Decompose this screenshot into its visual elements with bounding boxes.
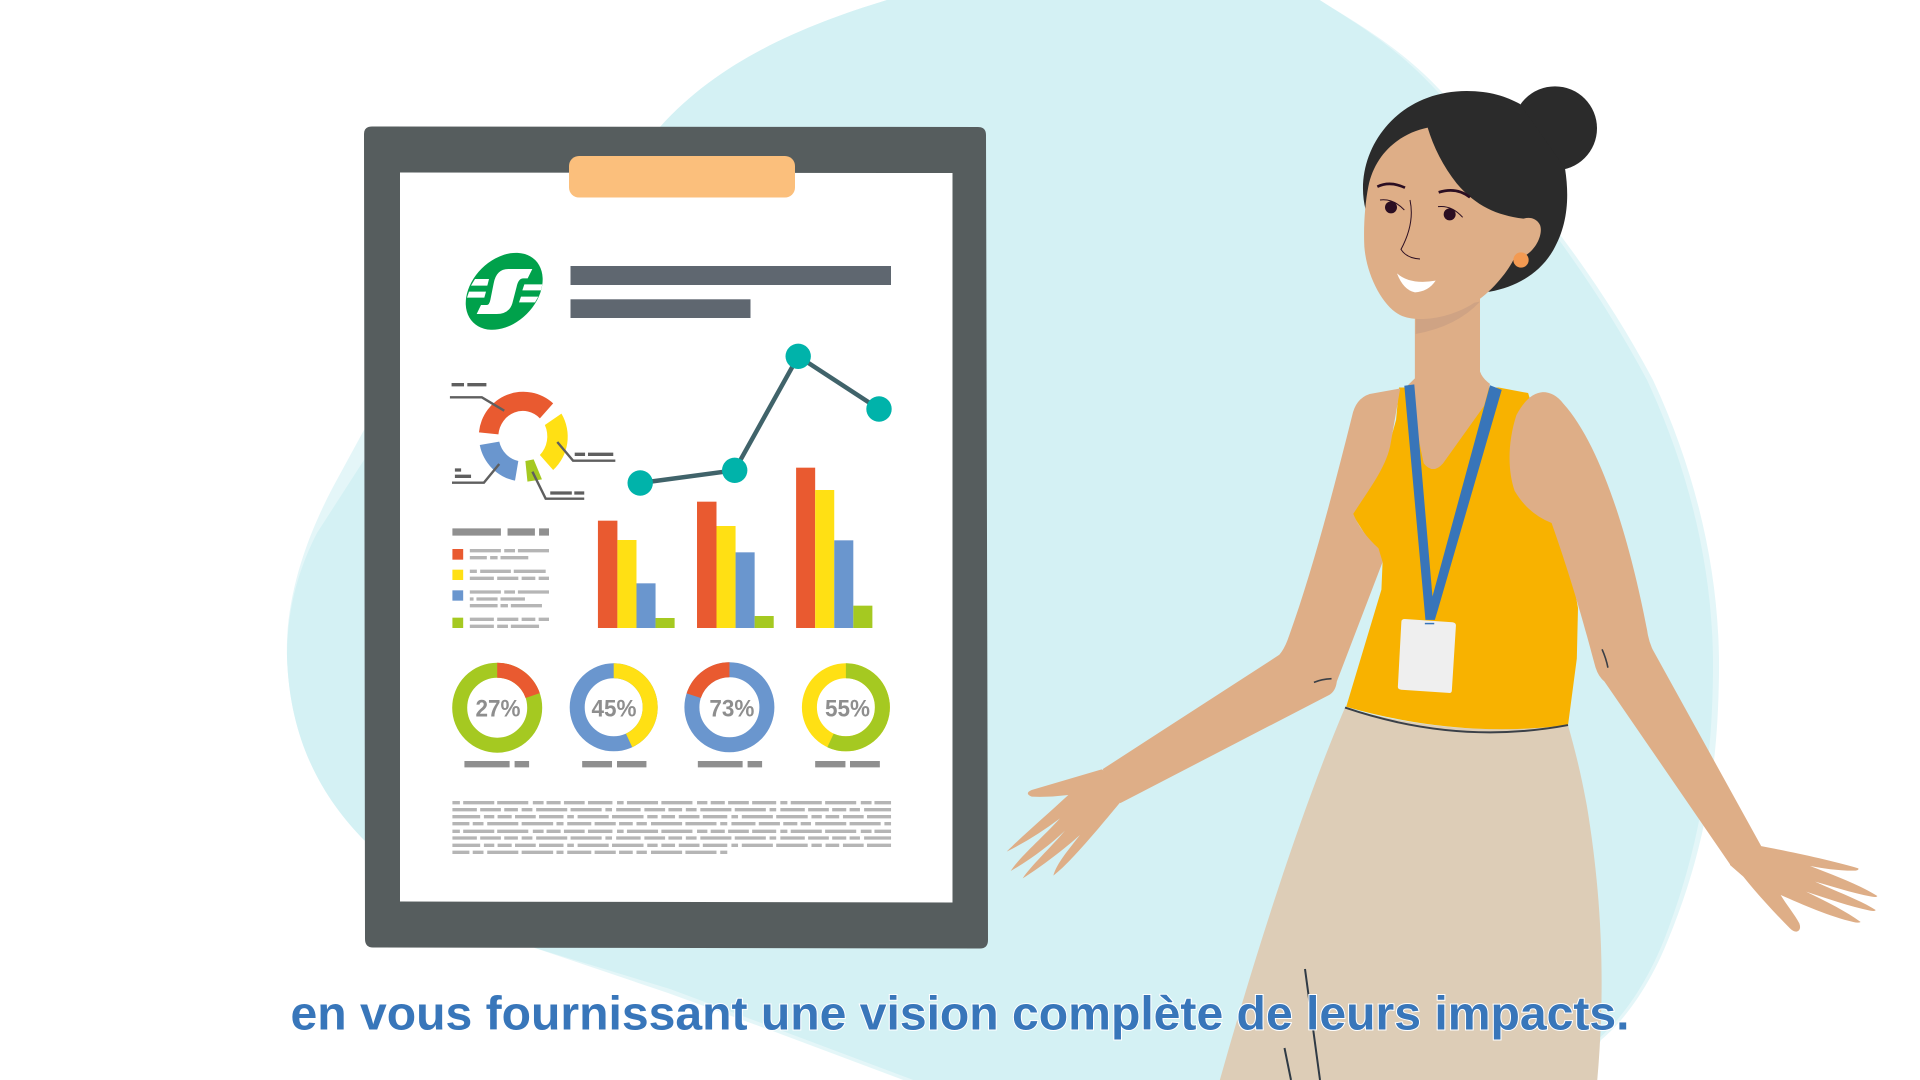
donut caption bars xyxy=(464,755,880,774)
panel: clipboard xyxy=(364,126,988,948)
hair xyxy=(1363,91,1567,293)
skirt xyxy=(1218,708,1602,1080)
chin shadow xyxy=(1416,302,1480,334)
left hand xyxy=(1007,769,1120,878)
badge xyxy=(1398,619,1456,693)
donut 45% xyxy=(577,671,650,744)
nose xyxy=(1401,200,1420,259)
lanyard xyxy=(1404,384,1502,620)
donut 73% xyxy=(682,660,777,755)
body xyxy=(1103,282,1761,1080)
tank top xyxy=(1346,388,1578,729)
earring xyxy=(1513,252,1529,268)
smile xyxy=(1397,273,1436,292)
face xyxy=(1364,128,1541,319)
donut 55%: 55% xyxy=(825,696,870,723)
donut 55% xyxy=(809,671,882,744)
legend xyxy=(452,532,549,628)
eyes and brows xyxy=(1377,184,1470,220)
neck and neckline xyxy=(1408,282,1490,469)
head xyxy=(1363,86,1597,334)
clipboard frame xyxy=(364,126,988,948)
waist line xyxy=(1345,708,1568,732)
bar chart xyxy=(598,468,872,628)
right hand xyxy=(1730,846,1877,932)
caption: en vous fournissant une vision complète de leurs impacts. xyxy=(290,986,1630,1040)
skirt fold lines xyxy=(1284,969,1320,1080)
logo xyxy=(450,238,558,345)
donut 73%: 73% xyxy=(709,696,754,723)
paragraph placeholder lines xyxy=(452,803,891,852)
left arm xyxy=(1103,388,1400,803)
clip xyxy=(569,156,795,198)
segmented donut chart with callouts xyxy=(450,385,615,499)
donut 45%: 45% xyxy=(592,696,636,723)
right arm xyxy=(1510,392,1761,878)
report title bars xyxy=(570,266,891,318)
hair bun xyxy=(1513,86,1597,170)
paper sheet xyxy=(400,172,952,902)
background blob xyxy=(287,0,1719,1080)
donut 27%: 27% xyxy=(476,696,520,723)
line chart xyxy=(628,344,892,496)
arm creases xyxy=(1314,649,1608,682)
illustration: woman presenting xyxy=(1007,86,1877,1080)
donut 27% xyxy=(460,670,535,745)
